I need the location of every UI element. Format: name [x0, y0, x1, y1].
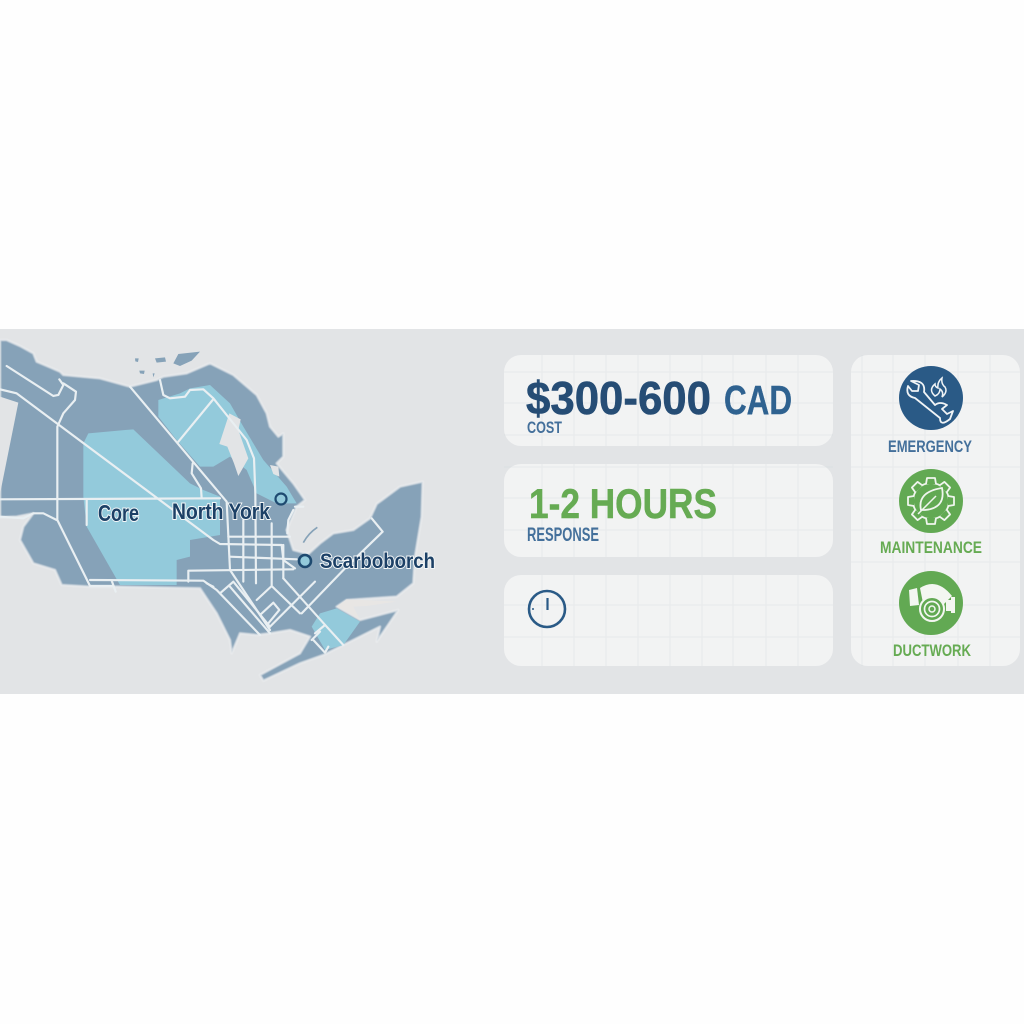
- icon: ductwork: [899, 571, 963, 635]
- label: Core: Core: [98, 500, 139, 526]
- response label: RESPONSE: [527, 525, 599, 546]
- marker: Scarborough: [299, 555, 311, 567]
- lake wedge west: [0, 397, 18, 494]
- islands: [135, 352, 200, 377]
- background band: [0, 329, 1024, 694]
- label: emergency: EMERGENCY: [888, 437, 973, 456]
- icon: emergency wrench and flame: [899, 366, 963, 430]
- marker: North York: [276, 494, 286, 504]
- panel: cost card: [504, 355, 833, 446]
- panel: response card: [504, 464, 833, 557]
- label: ductwork: DUCTWORK: [893, 641, 972, 660]
- currency: CAD: [724, 377, 792, 423]
- icon: clock: [529, 591, 565, 627]
- label: maintenance: MAINTENANCE: [880, 538, 982, 557]
- panel: services: [851, 355, 1020, 666]
- inner lake: [219, 413, 279, 477]
- zone: south east: [312, 608, 360, 650]
- shoreline arc: [303, 527, 317, 543]
- inlet: [337, 599, 397, 620]
- land mass: [0, 340, 423, 681]
- zone: core: [83, 429, 220, 585]
- zone: north york: [158, 385, 297, 503]
- panel: clock card: [504, 575, 833, 666]
- label: Scarboborch: Scarboborch: [320, 550, 435, 573]
- label: North York: North York: [172, 499, 271, 524]
- road network: [0, 366, 383, 653]
- cost value: $300-600: [526, 372, 711, 424]
- map of service area: [0, 340, 435, 681]
- cost label: COST: [527, 418, 562, 437]
- response value: 1-2 HOURS: [529, 480, 717, 527]
- icon: maintenance gear and leaf: [899, 469, 963, 533]
